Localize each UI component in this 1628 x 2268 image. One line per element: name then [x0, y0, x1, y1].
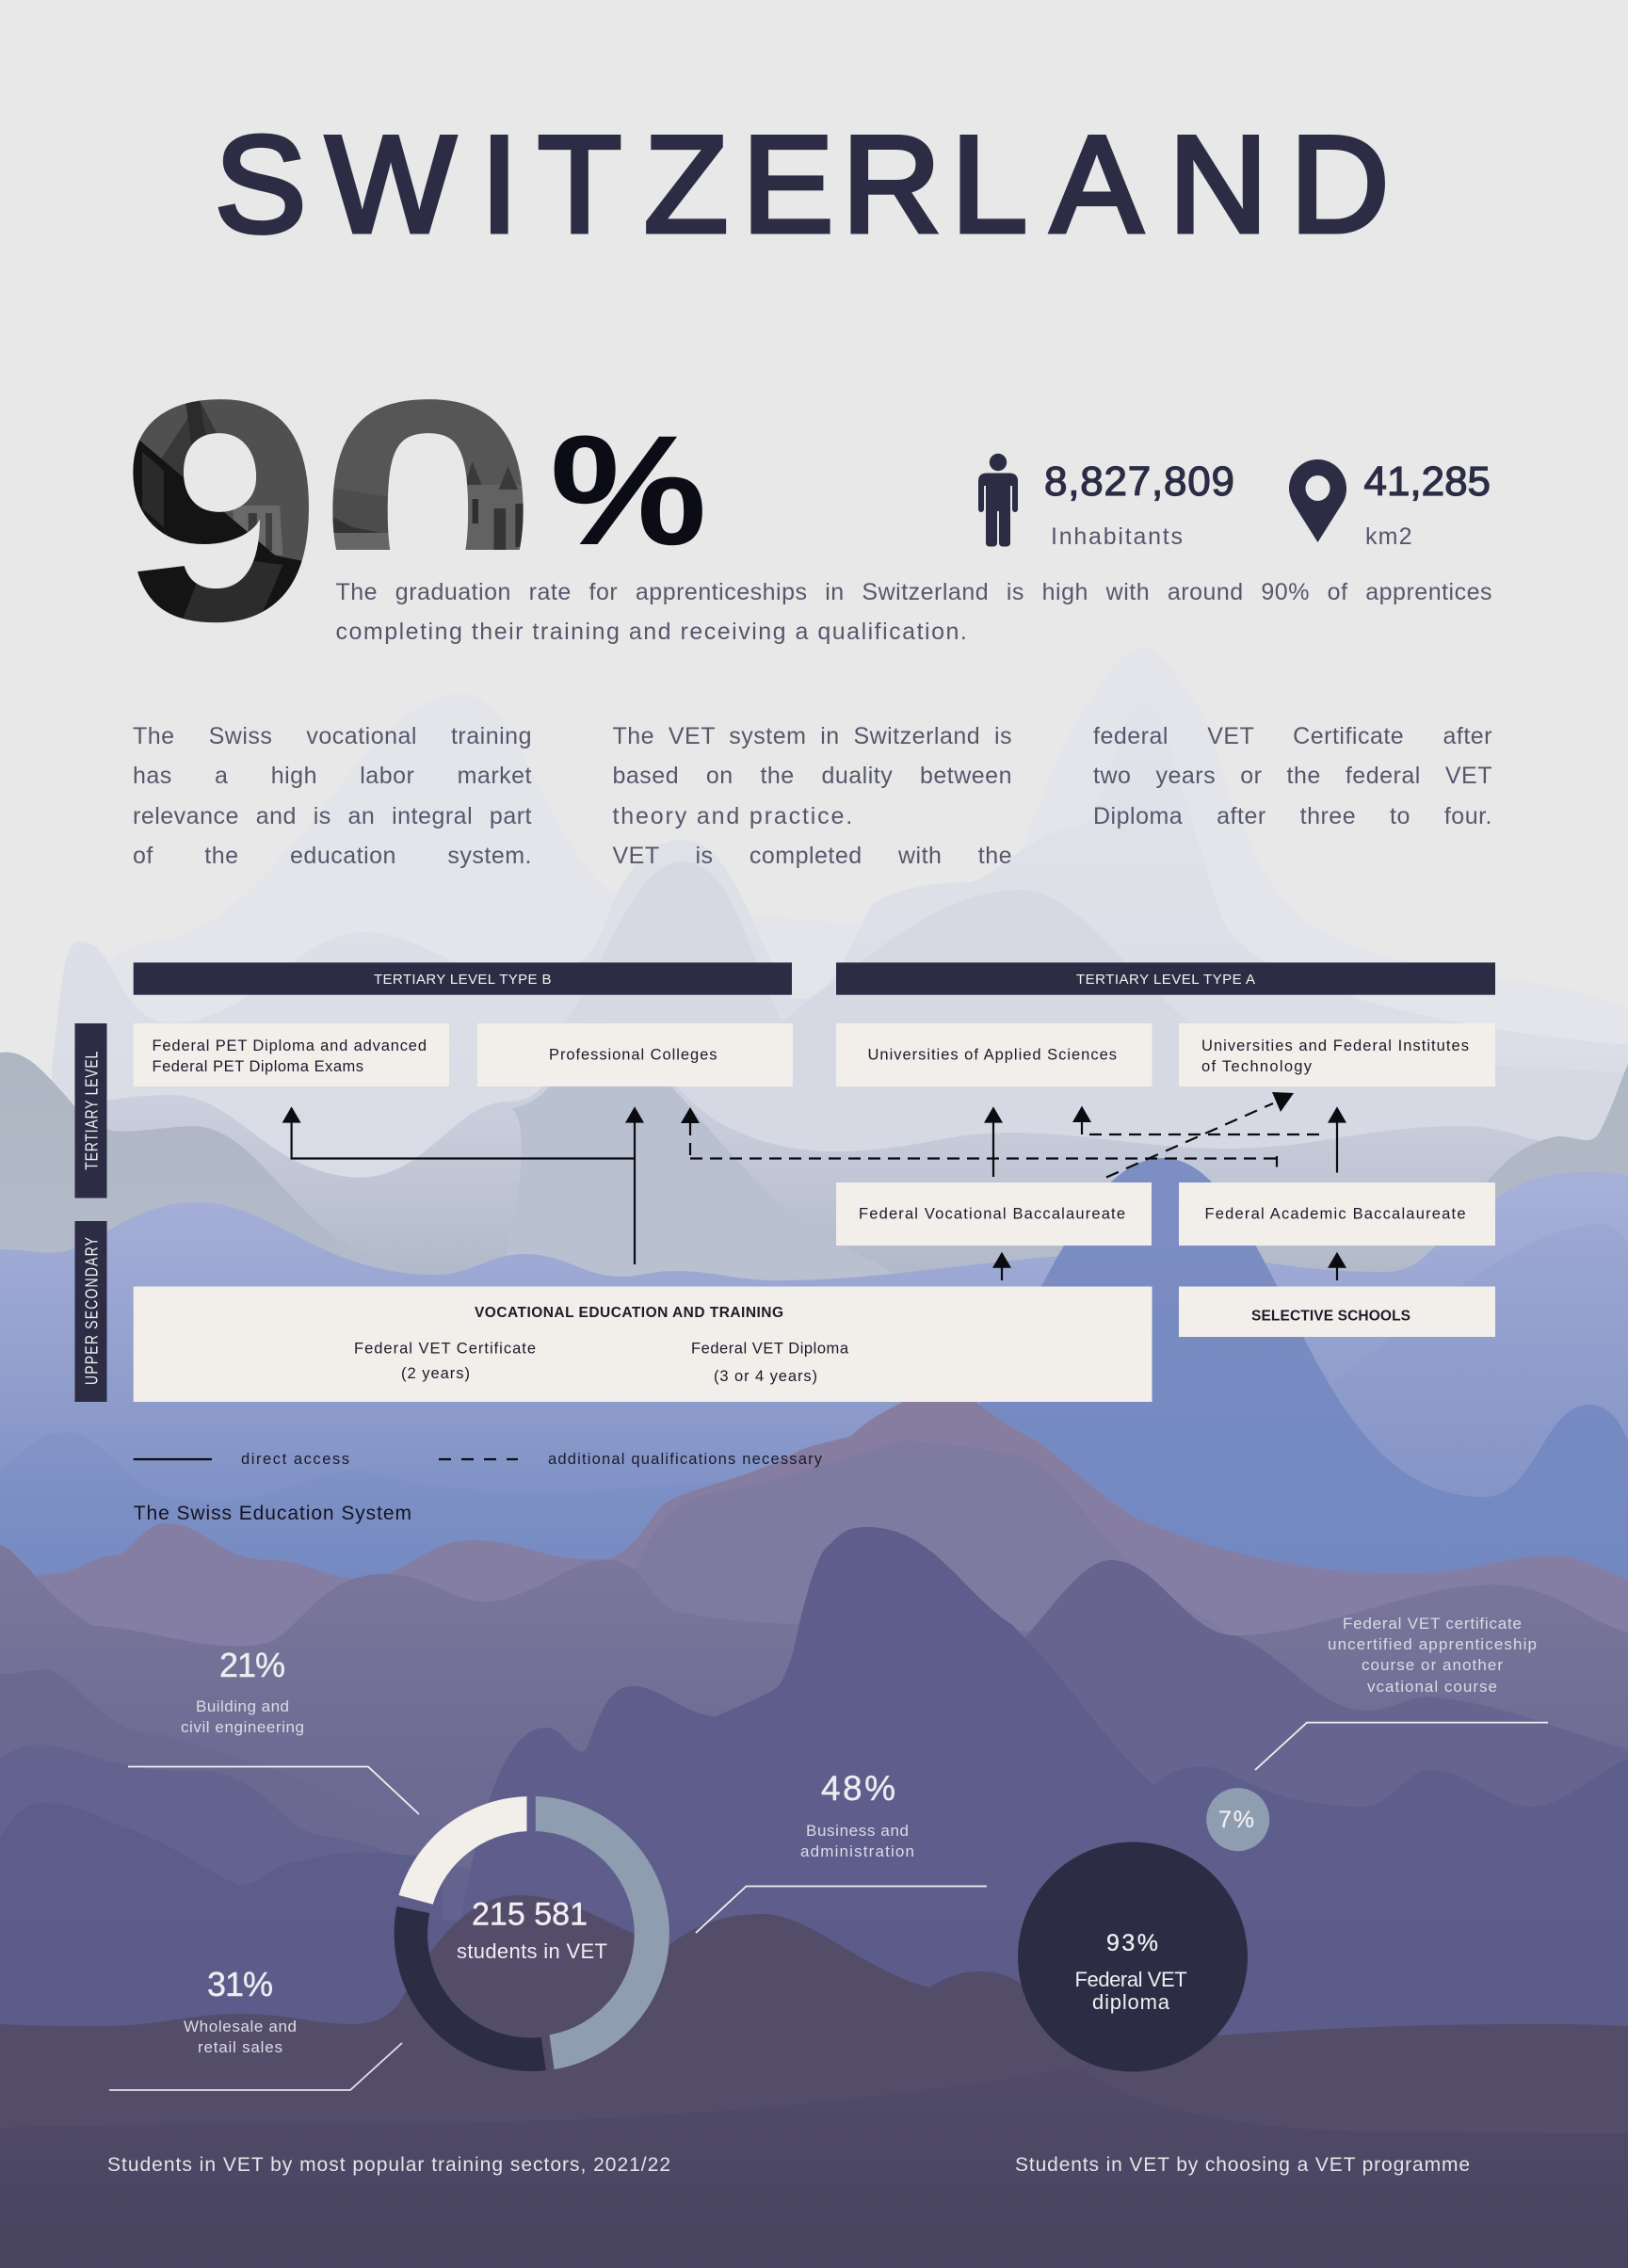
box: vocational education and training: Federal VET Diploma: [691, 1340, 849, 1357]
callout: 7% other courses: uncertified apprenticeship: [1328, 1635, 1537, 1653]
callout: 7% other courses: vcational course: [1367, 1678, 1497, 1696]
stat: area: km2: [1365, 523, 1412, 550]
box: vocational education and training: VOCATIONAL EDUCATION AND TRAINING: [475, 1305, 783, 1321]
box: universities and institutes of technology: [1179, 1023, 1495, 1086]
donut centre text: 215 581: [472, 1896, 588, 1932]
stat: inhabitants: 8,827,809: [1044, 458, 1234, 505]
segment: 31% wholesale and retail: [395, 1906, 546, 2071]
text block: column two: based on the duality between: [612, 763, 1012, 789]
circle: 7%: [1206, 1788, 1269, 1851]
diagram caption: The Swiss Education System: [134, 1503, 411, 1524]
box: universities of applied sciences: Universities of Applied Sciences: [868, 1047, 1117, 1064]
title: SWITZERLAND: [215, 107, 1389, 261]
box: vocational education and training: Federal VET Certificate: [354, 1340, 536, 1357]
side label: upper secondary: UPPER SECONDARY: [83, 1237, 102, 1385]
circle: 93% federal VET diploma: [1018, 1842, 1248, 2071]
box: PET diploma: [134, 1023, 449, 1086]
percent sign: %: [550, 403, 707, 578]
caption: training sectors chart: Students in VET by most popular training sectors, 2021/22: [107, 2154, 670, 2176]
callout: 48%: [696, 1769, 987, 1933]
callout: 48%: administration: [800, 1842, 914, 1860]
box: PET diploma: Federal PET Diploma Exams: [153, 1058, 363, 1075]
box: universities and institutes of technology: of Technology: [1201, 1058, 1313, 1075]
arrows: direct access: [282, 1106, 1346, 1280]
legend: direct access: [241, 1451, 349, 1468]
circle: 93% federal VET diploma: 93%: [1106, 1930, 1158, 1956]
icon: map pin: [1289, 459, 1346, 542]
chart: programme circles: [1018, 1615, 1548, 2071]
header: tertiary level type A: TERTIARY LEVEL TYPE A: [1076, 972, 1255, 988]
box: universities of applied sciences: [836, 1023, 1152, 1086]
callout: 21%: [128, 1646, 419, 1814]
text block: graduation rate: [335, 579, 1492, 645]
box: professional colleges: [477, 1023, 793, 1086]
chart: donut of training sectors: [395, 1796, 669, 2071]
caption: programme chart: Students in VET by choosing a VET programme: [1015, 2154, 1470, 2176]
callout: 21%: Building and: [196, 1697, 289, 1715]
callout: 48%: Business and: [806, 1822, 909, 1840]
text block: column one: relevance and is an integral part: [133, 803, 532, 829]
callout: 31%: [109, 1965, 402, 2090]
side label: upper secondary: [75, 1221, 107, 1402]
text block: column two: [612, 723, 1012, 869]
arrows: additional qualifications: [681, 1092, 1327, 1177]
donut centre text: [457, 1896, 607, 1963]
segment: 21% building: [399, 1796, 527, 1905]
text block: column two: The VET system in Switzerland is: [612, 723, 1012, 749]
callout: 7% other courses: [1255, 1615, 1548, 1770]
stat: area: 41,285: [1363, 458, 1491, 505]
callout: 21%: civil engineering: [181, 1718, 304, 1736]
text block: column three: [1093, 723, 1492, 829]
callout: 21%: 21%: [219, 1646, 285, 1684]
box: universities and institutes of technology: Universities and Federal Institutes: [1201, 1037, 1469, 1054]
box: selective schools: [1179, 1286, 1495, 1337]
circle: 7%: 7%: [1218, 1807, 1254, 1833]
box: PET diploma: Federal PET Diploma and advanced: [153, 1037, 427, 1054]
text block: graduation rate: completing their training and receiving a qualification.: [335, 619, 968, 645]
segment: 48% business and administration: [536, 1796, 669, 2069]
box: federal vocational baccalaureate: [836, 1182, 1152, 1246]
circle: 93% federal VET diploma: Federal VET: [1075, 1968, 1187, 1991]
stat: inhabitants: [1044, 458, 1234, 550]
donut centre text: students in VET: [457, 1939, 607, 1963]
text block: column one: of the education system.: [133, 843, 532, 869]
callout: 7% other courses: course or another: [1362, 1656, 1503, 1674]
text block: column one: The Swiss vocational training: [133, 723, 532, 749]
header: tertiary level type B: TERTIARY LEVEL TYPE B: [374, 972, 552, 988]
callout: 31%: 31%: [207, 1965, 273, 2003]
box: federal vocational baccalaureate: Federal Vocational Baccalaureate: [859, 1206, 1125, 1223]
stat: inhabitants: Inhabitants: [1051, 523, 1183, 550]
box: selective schools: SELECTIVE SCHOOLS: [1251, 1309, 1410, 1325]
header: tertiary level type A: [836, 962, 1495, 995]
box: federal academic baccalaureate: [1179, 1182, 1495, 1246]
text block: column three: federal VET Certificate after: [1093, 723, 1492, 749]
side label: tertiary level: [75, 1023, 107, 1198]
text block: column one: has a high labor market: [133, 763, 532, 789]
box: vocational education and training: [134, 1286, 1152, 1402]
legend: additional qualifications necessary: [548, 1451, 823, 1468]
circle: 93% federal VET diploma: diploma: [1092, 1990, 1170, 2014]
callout: 48%: 48%: [821, 1769, 895, 1808]
digit 0, cut at the bottom: 0: [316, 334, 540, 687]
text block: column two: theory and practice.: [612, 803, 854, 829]
text block: graduation rate: The graduation rate for apprenticeships in Switzerland is high with around 90% of apprentices: [335, 579, 1492, 605]
box: vocational education and training: (2 years): [401, 1365, 470, 1382]
callout: 7% other courses: Federal VET certificate: [1343, 1615, 1522, 1633]
callout: 31%: retail sales: [198, 2038, 282, 2056]
box: professional colleges: Professional Colleges: [549, 1047, 717, 1064]
text block: column one: [133, 723, 532, 869]
legend: [134, 1451, 823, 1468]
stat: area: [1363, 458, 1491, 550]
text block: column three: Diploma after three to four.: [1093, 803, 1492, 829]
panel: education system diagram: [75, 962, 1495, 1524]
digit 9: 9: [121, 334, 322, 686]
big number 90 filled with photo: [121, 334, 540, 687]
text block: column three: two years or the federal VET: [1093, 763, 1492, 789]
icon: person: [978, 454, 1018, 546]
box: vocational education and training: (3 or 4 years): [714, 1368, 817, 1385]
header: tertiary level type B: [134, 962, 792, 995]
box: federal academic baccalaureate: Federal Academic Baccalaureate: [1205, 1206, 1465, 1223]
side label: tertiary level: TERTIARY LEVEL: [83, 1052, 102, 1170]
callout: 31%: Wholesale and: [184, 2018, 297, 2035]
text block: column two: VET is completed with the: [612, 843, 1012, 869]
